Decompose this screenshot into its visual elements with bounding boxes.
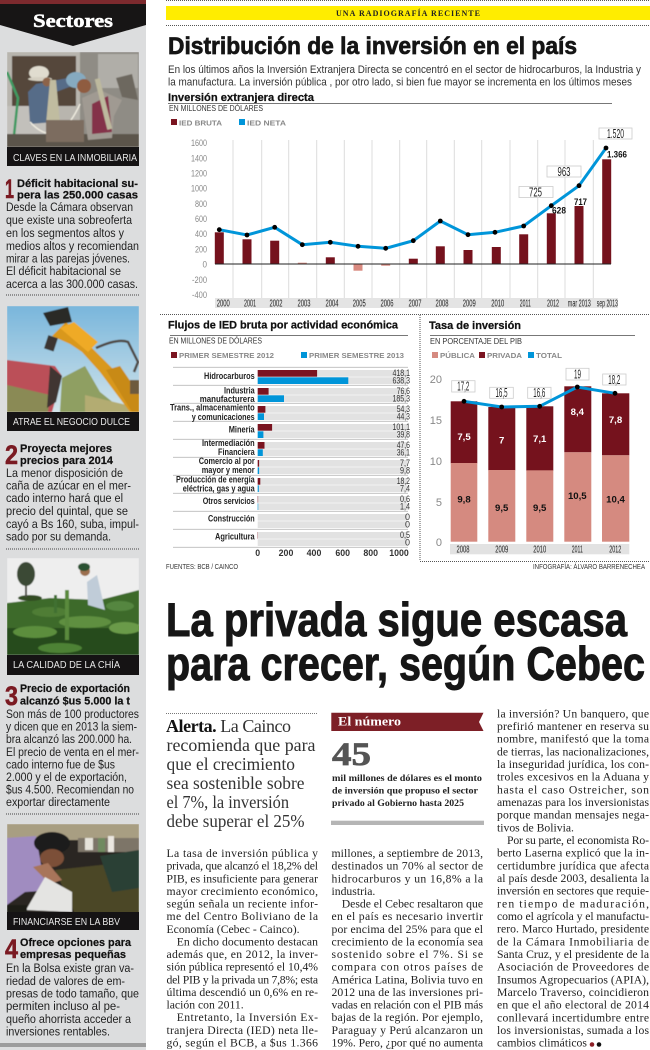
article column 1: según señala un reciente infor- [166, 898, 318, 910]
total callouts: 18,2 [608, 373, 620, 387]
item 4 text: presas de todo tamaño, que [6, 986, 139, 1000]
header: Sectores: Sectores [33, 11, 113, 32]
chart heading: EN PORCENTAJE DEL PIB [430, 337, 522, 346]
sector labels: Industria [224, 385, 255, 395]
caption: financiarse en la bbv [7, 912, 139, 930]
chart: tasa de inversion [429, 320, 635, 556]
x axis: 200 [279, 548, 293, 558]
callout: alerta: el 7%, la inversión [166, 792, 289, 812]
photo: chia field [7, 558, 141, 655]
legend: TOTAL [536, 351, 562, 360]
x axis years: 2011 [520, 298, 531, 310]
article column 1: además que, en 2012, la inver- [166, 948, 318, 961]
article column 3: berto Laserna explicó que la in- [497, 847, 649, 860]
value labels: 9,8 [400, 466, 410, 476]
article column 2: destinados un 70% al sector de [332, 860, 483, 873]
value labels [392, 368, 410, 548]
legend: PRIMER SEMESTRE 2012 [179, 351, 274, 360]
article column 2: Paraguay y Perú alcanzaron un [332, 1024, 483, 1037]
item 4 heading: 4 [5, 934, 18, 964]
chart: inversion extranjera directa [168, 92, 632, 310]
value labels: 1,4 [400, 502, 410, 512]
chart heading [429, 320, 635, 346]
x axis years: 2009 [495, 544, 508, 556]
article column 3: amenazas para los inversionistas [497, 796, 649, 809]
item 3 heading: alcanzó $us 5.000 la t [20, 696, 130, 708]
values: publica: 10,4 [606, 494, 625, 506]
value labels: 0 [405, 538, 410, 548]
article column 2: hidrocarburos y un 16,8% a la [332, 872, 484, 885]
y axis: 800 [195, 198, 207, 209]
item 3 text: cado interno fue de $us [6, 758, 115, 772]
total callouts [452, 368, 626, 400]
y axis: 10 [430, 456, 442, 468]
value callouts: 1.366 [607, 150, 627, 160]
x axis years: 2008 [436, 298, 449, 310]
item 2 text: cayó a Bs 160, suba, impul- [6, 517, 139, 531]
line: IED neta [217, 146, 608, 251]
main headline [166, 593, 645, 690]
article column 1: Economía (Cebec - Cainco). [166, 923, 300, 936]
legend: PÚBLICA [440, 351, 476, 360]
sector labels: y comunicaciones [192, 412, 255, 422]
y axis: 200 [195, 244, 207, 254]
item 1 heading: Déficit habitacional su- [17, 178, 138, 190]
title: Distribución de la inversión en el país [168, 33, 577, 60]
chart heading [168, 92, 612, 113]
x axis years: 2011 [572, 544, 583, 556]
item 1 text: que existe una sobreoferta [6, 213, 132, 227]
header: Sectores [0, 0, 146, 46]
article column 1 [166, 847, 319, 1050]
article column 2: por encima del 25% para que el [332, 923, 484, 936]
chart heading: Inversión extranjera directa [168, 92, 315, 104]
item 3 text: $us 4.500. Recomiendan no [6, 782, 134, 796]
bars: privada [451, 386, 629, 471]
article column 3: conllevará incertidumbre entre [497, 1011, 649, 1024]
x axis years: 2010 [533, 544, 546, 556]
chart heading: Flujos de IED bruta por actividad económica [168, 320, 399, 332]
x axis years: 2001 [244, 298, 256, 310]
article column 1: última descendió un 0,6% en re- [166, 986, 318, 999]
article column 2: 19%. Pero, ¿por qué no aumenta [332, 1036, 484, 1050]
item 2 text: precio del quintal, que se [6, 504, 128, 518]
article column 3: inversión en sectores que requie- [497, 885, 649, 898]
value labels: 0 [405, 520, 410, 530]
caption: atrae el negocio dulce: ATRAE EL NEGOCIO DULCE [13, 417, 130, 428]
caption: atrae el negocio dulce [7, 412, 139, 431]
chart heading: EN MILLONES DE DÓLARES [169, 104, 263, 113]
total callouts: 19 [574, 368, 581, 382]
bars: publica [451, 452, 629, 542]
legend: PRIVADA [487, 351, 523, 360]
x axis: 0 [255, 548, 260, 558]
article column 3: Marcelo Traverso, coincidieron [497, 986, 649, 999]
item 3 text [6, 707, 139, 809]
item 2 text: caña de azúcar en el mer- [6, 478, 131, 492]
item 2 text [6, 466, 139, 544]
y axis: 400 [195, 228, 207, 239]
value labels: 18,2 [397, 476, 410, 486]
value callouts [519, 127, 632, 216]
item 2 text: La menor disposición de [6, 466, 123, 480]
sector labels: Minería [229, 425, 256, 435]
y axis: 20 [430, 374, 442, 386]
item 3 text: 2.000 y el de exportación, [6, 770, 127, 784]
item 1 heading: 1 [5, 174, 14, 204]
caption: claves en la inmobiliaria [7, 147, 139, 166]
y axis [191, 137, 207, 300]
item 2 text: sado por su demanda. [6, 530, 111, 544]
values: publica [457, 491, 625, 514]
value labels: 7,4 [400, 484, 410, 494]
item 3 heading: 3 [5, 681, 18, 711]
article column 2: bajas de la región. Por ejemplo, [332, 1011, 483, 1024]
item 3 text: bra alcanzó las 200.000 ha. [6, 732, 132, 746]
intro text [168, 64, 641, 88]
sector labels: Comercio al por [199, 456, 255, 466]
sector labels: manufacturera [200, 394, 256, 404]
value labels: 44,3 [397, 412, 410, 422]
value labels: 101,1 [392, 422, 410, 432]
values: privada: 8,4 [571, 407, 585, 418]
y axis: 1400 [191, 152, 207, 164]
kicker band: UNA RADIOGRAFÍA RECIENTE [336, 8, 480, 18]
item 4 text: permiten incluso al pe- [6, 999, 120, 1013]
photo: construction workers [7, 52, 139, 147]
x axis years: 2005 [353, 298, 366, 310]
x axis years: 2010 [491, 298, 504, 310]
article column 2: 2012 una de las inversiones pri- [332, 986, 483, 999]
x axis: 400 [307, 548, 321, 558]
value labels: 7,7 [400, 458, 410, 468]
item 4 heading: Ofrece opciones para [20, 937, 132, 949]
caption: financiarse en la bbv: FINANCIARSE EN LA BBV [13, 917, 120, 928]
number description [332, 773, 482, 809]
bars: semestre 2013 [258, 377, 348, 510]
article column 2: sostenido sobre el 7%. Si se [332, 948, 483, 961]
x axis years: 2012 [609, 544, 622, 556]
article column 2: industria. [332, 885, 375, 898]
total callouts: 17,2 [457, 380, 469, 394]
banner [331, 713, 484, 731]
item 3 text: Son más de 100 productores [6, 707, 139, 721]
article column 3: troles excesivos en la Aduana y [497, 771, 649, 784]
item 1 text: en los segmentos altos y [6, 226, 125, 240]
article column 2: crecimiento de la economía sea [332, 935, 484, 948]
value labels: 0,6 [400, 494, 410, 504]
x axis: 600 [335, 548, 350, 558]
x axis: 1000 [389, 548, 409, 558]
x axis years: 2009 [463, 298, 476, 310]
item 3 text: y dicen que en 2013 la siem- [6, 720, 137, 734]
y axis: 1600 [191, 137, 207, 148]
article column 3: tivos de Bolivia. [497, 821, 574, 834]
y axis: 15 [430, 415, 442, 427]
values: publica: 9,5 [495, 503, 509, 514]
article column 1: Entretanto, la Inversión Ex- [177, 1011, 318, 1024]
legend [171, 118, 287, 128]
sector labels: eléctrica, gas y agua [183, 484, 256, 494]
legend: IED NETA [247, 118, 287, 128]
item 1 heading [5, 174, 138, 204]
values: publica: 9,5 [533, 503, 547, 514]
item 3 heading: Precio de exportación [20, 683, 130, 695]
y axis: -200 [192, 274, 207, 285]
x axis [255, 548, 409, 558]
item 4 heading: empresas pequeñas [20, 949, 126, 961]
value labels: 418,1 [392, 368, 410, 378]
value labels: 54,3 [397, 404, 410, 414]
values: publica: 9,8 [457, 494, 471, 506]
callout: alerta: sea sostenible sobre [166, 773, 305, 793]
value labels: 0,5 [400, 530, 410, 540]
article column 3: como el agrícola y el manufactu- [497, 910, 649, 923]
line: total [462, 385, 617, 409]
photo: stock exchange trader [7, 824, 139, 914]
x axis years [450, 544, 629, 556]
article column 3: Santa Cruz, y el presidente de la [497, 948, 650, 961]
x axis years: 2006 [380, 298, 394, 310]
article column 3: Insumos Agropecuarios (APIA), [497, 973, 649, 986]
article column 1: En dicho documento destacan [177, 935, 318, 948]
legend: PRIMER SEMESTRE 2013 [309, 351, 404, 360]
callout: alerta: recomienda que para [166, 735, 316, 755]
value labels: 47,6 [397, 440, 410, 450]
bars: IED bruta [215, 159, 611, 271]
article column 3: de tierras, las nacionalizaciones, [497, 745, 649, 758]
article column 3 [497, 707, 650, 1050]
y axis: 600 [195, 213, 207, 224]
values: privada: 7,8 [609, 415, 623, 426]
legend [432, 351, 562, 360]
value callouts: 963 [558, 165, 571, 179]
item 2 heading: precios para 2014 [20, 455, 114, 467]
y axis: 0 [436, 537, 442, 549]
y axis: 1200 [191, 168, 207, 178]
item 4 heading [5, 934, 132, 964]
value labels: 0 [405, 512, 410, 522]
article column 1: del PIB y la privada un 7,8%; esta [166, 973, 319, 986]
total callouts: 16,6 [533, 386, 545, 400]
article column 3: los inversionistas, sumada a los [497, 1024, 649, 1037]
value labels: 39,8 [397, 430, 410, 440]
item 1 text: acerca a las 300.000 casas. [6, 277, 138, 291]
sector labels: Financiera [218, 447, 255, 457]
sector labels: Agricultura [215, 531, 256, 541]
item 4 text [6, 961, 139, 1038]
item 1 heading: pera las 250.000 casas [17, 190, 138, 202]
sector labels: Otros servicios [203, 496, 255, 506]
item 4 text: riedad de valores de em- [6, 974, 125, 988]
article column 3: porque mandan mensajes nega- [497, 809, 649, 822]
x axis years: mar 2013 [568, 298, 591, 310]
item 1 text: Desde la Cámara observan [6, 200, 133, 214]
kicker band [166, 6, 650, 20]
x axis years: 2004 [326, 298, 339, 310]
x axis years: 2000 [217, 298, 230, 310]
item 3 text: El precio de venta en el mer- [6, 745, 139, 759]
values: privada: 7 [499, 436, 504, 446]
value callouts: 1.520 [607, 127, 624, 141]
article column 1: tranjera Directa (IED) neta lle- [166, 1024, 318, 1037]
value labels: 36,1 [397, 448, 410, 458]
bars: semestre 2012 [258, 370, 317, 539]
callout: alerta: debe superar el 25% [166, 811, 305, 831]
number description: mil millones de dólares es el monto [332, 773, 482, 784]
item 4 text: inversiones rentables. [6, 1024, 110, 1038]
banner: El número [338, 714, 401, 728]
y axis [430, 374, 442, 549]
article column 2: en el país es necesario invertir [332, 910, 483, 923]
sector labels: Construcción [208, 514, 255, 524]
legend: IED BRUTA [179, 118, 223, 128]
article column 2: América Latina, Bolivia tuvo en [332, 973, 483, 986]
x axis years: 2012 [547, 298, 559, 310]
article column 3: Asociación de Proveedores de [497, 961, 649, 974]
y axis: 5 [436, 497, 442, 509]
article column 1: gó, según el BCB, a $us 1.366 [166, 1036, 318, 1050]
item 1 text: medios altos y recomiendan [6, 239, 139, 253]
item 3 text: exportar directamente [6, 795, 110, 809]
article column 3: hasta el caso Ostreicher, son [497, 783, 649, 796]
value labels: 638,3 [392, 376, 410, 386]
photo: sugar cane harvester [7, 306, 139, 412]
article column 3: prefirió mantener en reserva su [497, 720, 649, 733]
chart heading: Tasa de inversión [429, 320, 521, 332]
article column 1: privada, que alcanzó el 18,2% del [166, 860, 319, 873]
value labels: 185,3 [392, 394, 410, 404]
values: privada: 7,5 [457, 432, 471, 443]
article column 2 [332, 847, 484, 1050]
article column 3: nombre, manifestó que la toma [497, 733, 650, 746]
sector labels: mayor y menor [202, 465, 255, 475]
article column 3: Por su parte, el economista Ro- [507, 834, 649, 847]
x axis years: 2007 [408, 298, 422, 310]
item 4 text: En la Bolsa existe gran va- [6, 961, 134, 975]
sector labels: Intermediación [202, 438, 255, 448]
article column 1: mayor crecimiento económico, [166, 885, 318, 898]
value labels: 76,6 [397, 386, 410, 396]
article column 1: sión pública representó el 10,4% [166, 961, 318, 974]
legend [171, 351, 404, 360]
values: publica: 10,5 [568, 491, 587, 502]
big number: 45 [332, 737, 371, 773]
article column 3: rero. Marco Hurtado, presidente [497, 923, 649, 936]
sector labels: Trans., almacenamiento [170, 402, 255, 412]
sector labels [170, 371, 256, 541]
x axis years [215, 298, 618, 310]
panel: sectores sidebar [0, 0, 146, 1050]
item 1 text [6, 200, 139, 291]
callout: alerta: que el crecimiento [166, 754, 295, 774]
x axis: 800 [363, 548, 378, 558]
article column 2: compara con otros países de [332, 961, 483, 974]
y axis: 0 [202, 258, 207, 270]
article column 3: de la Cámara Inmobiliaria de [497, 935, 649, 948]
article column 3: la inversión? Un banquero, que [497, 707, 649, 720]
callout: el numero [331, 713, 484, 825]
y axis: 1000 [191, 182, 207, 194]
article column 3: al país desde 2003, desalienta la [497, 872, 650, 885]
article column 3: la inseguridad jurídica, los con- [497, 758, 649, 771]
chart heading [168, 320, 408, 346]
callout: alerta: Alerta. La Cainco [166, 716, 291, 736]
x axis years: 2003 [298, 298, 311, 310]
total callouts: 16,5 [496, 386, 508, 400]
item 2 text: cado interno hará que el [6, 491, 123, 505]
x axis years: 2008 [456, 544, 470, 556]
values: privada [457, 407, 623, 446]
value callouts: 717 [574, 197, 587, 207]
bar tracks [258, 370, 408, 546]
article column 3: cambios climáticos [497, 1037, 587, 1050]
article column 2: millones, a septiembre de 2013, [332, 847, 483, 860]
caption: claves en la inmobiliaria: CLAVES EN LA INMOBILIARIA [13, 153, 137, 164]
article column 2: Desde el Cebec resaltaron que [342, 898, 483, 910]
article column 3: ren tiempo de maduración, [497, 897, 649, 910]
sector labels: Producción de energía [176, 474, 255, 484]
article column 1: La tasa de inversión pública y [166, 847, 318, 860]
article column 1: me del Centro Boliviano de la [166, 910, 319, 923]
caption: la calidad de la chia: LA CALIDAD DE LA CHÍA [13, 658, 120, 671]
values: privada: 7,1 [533, 434, 547, 445]
value callouts: 725 [529, 186, 542, 200]
article column 1: lación con 2011. [166, 999, 244, 1012]
callout: alerta [166, 716, 316, 831]
y axis: -400 [192, 289, 207, 300]
article column 3: en que el año electoral de 2014 [497, 999, 649, 1012]
item 1 text: mirar a las parejas jóvenes. [6, 252, 130, 266]
item 2 heading: 2 [5, 440, 18, 470]
article column 3: certidumbre jurídica que afecta [497, 859, 650, 872]
article column 2: vadas en relación con el PIB más [332, 999, 483, 1012]
item 3 heading [5, 681, 130, 711]
caption: la calidad de la chia [7, 655, 139, 675]
chart heading: EN MILLONES DE DÓLARES [169, 336, 262, 346]
value callouts: 628 [552, 206, 566, 216]
chart: flujos de IED bruta [168, 320, 410, 558]
number description: privado al Gobierno hasta 2025 [332, 798, 464, 809]
number description: de inversión que propuso el sector [332, 786, 479, 796]
item 1 text: El déficit habitacional se [6, 264, 121, 278]
sources: FUENTES: BCB / CAINCO [166, 562, 238, 571]
item 4 text: queño ahorrista acceder a [6, 1012, 131, 1026]
x axis years: 2002 [270, 298, 283, 310]
item 2 heading [5, 440, 114, 470]
end marks [590, 1042, 601, 1047]
article column 1: PIB, es insuficiente para generar [166, 872, 318, 885]
x axis years: sep 2013 [597, 298, 618, 310]
item 2 heading: Proyecta mejores [20, 443, 112, 455]
sector labels: Hidrocarburos [204, 371, 255, 381]
